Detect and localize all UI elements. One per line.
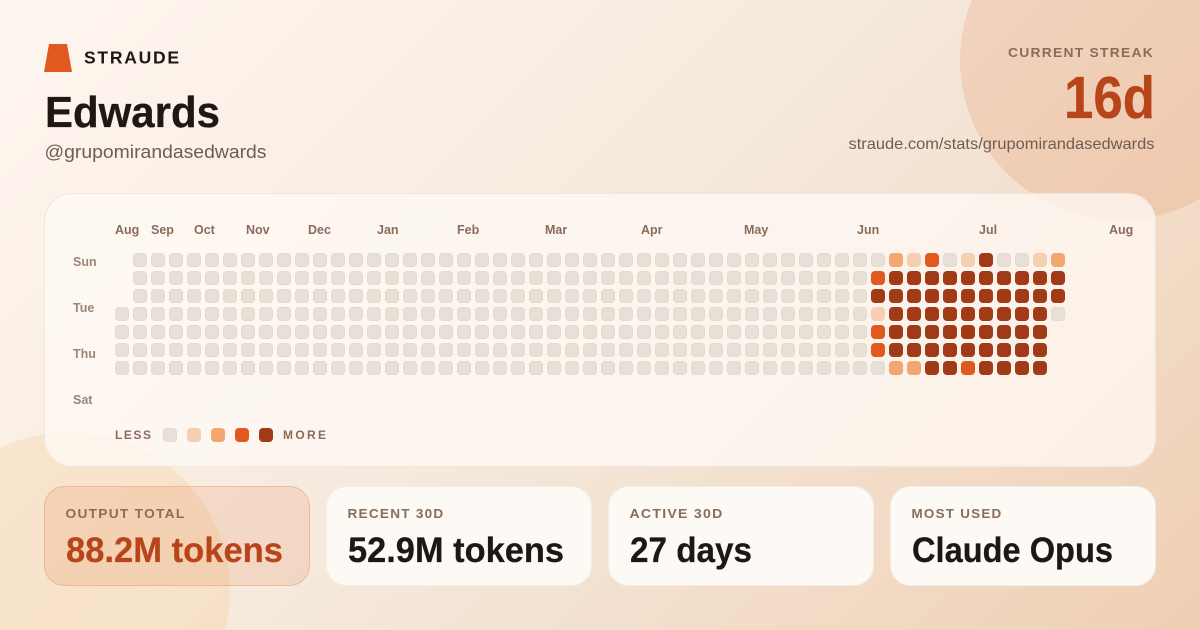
icon: straude trapezoid logo [44, 44, 72, 72]
stat card: most used: MOST USED [912, 506, 1002, 521]
weekday labels: Thu [73, 347, 96, 361]
stat card: recent 30d [326, 486, 592, 586]
weekday labels: Tue [73, 301, 94, 315]
month labels: Nov [246, 223, 270, 237]
streak label: CURRENT STREAK [1008, 45, 1154, 60]
month labels: Aug [1109, 223, 1133, 237]
current streak block [848, 45, 1155, 153]
legend [115, 428, 326, 442]
weekday labels: Sun [73, 255, 97, 269]
stat card: output total [44, 486, 310, 586]
stat card: recent 30d: 52.9M tokens [348, 530, 564, 570]
month labels: May [744, 223, 768, 237]
month labels: Jun [857, 223, 879, 237]
stat card: active 30d [608, 486, 874, 586]
brand logo and name [44, 44, 179, 72]
stat card: most used [890, 486, 1156, 586]
panel: contribution heatmap [44, 194, 1156, 466]
month labels: Aug [115, 223, 139, 237]
decorative circle bottom left [0, 432, 230, 630]
panel background [44, 194, 1156, 466]
legend: MORE [283, 428, 326, 442]
stat card: most used: Claude Opus [912, 530, 1113, 570]
weekday labels: Sat [73, 393, 93, 407]
month labels: Oct [194, 223, 216, 237]
streak value: 16d [1064, 65, 1155, 131]
stat card: recent 30d: RECENT 30D [348, 506, 444, 521]
stat card: output total: OUTPUT TOTAL [66, 506, 186, 521]
heatmap grid [115, 253, 1065, 375]
month labels: Feb [457, 223, 480, 237]
profile url: straude.com/stats/grupomirandasedwards [848, 136, 1154, 153]
month labels [115, 223, 1133, 237]
month labels: Jul [979, 223, 997, 237]
user handle: @grupomirandasedwards [44, 142, 266, 162]
legend: LESS [115, 428, 151, 442]
heading: user name: Edwards [45, 88, 220, 137]
stat card: output total: 88.2M tokens [66, 530, 283, 570]
month labels: Jan [377, 223, 399, 237]
stat card: active 30d: 27 days [630, 530, 752, 570]
stat card: active 30d: ACTIVE 30D [630, 506, 724, 521]
month labels: Mar [545, 223, 567, 237]
decorative circle top right [960, 0, 1200, 220]
weekday labels [73, 255, 97, 407]
month labels: Sep [151, 223, 174, 237]
month labels: Dec [308, 223, 331, 237]
brand name: STRAUDE [84, 48, 179, 68]
month labels: Apr [641, 223, 663, 237]
